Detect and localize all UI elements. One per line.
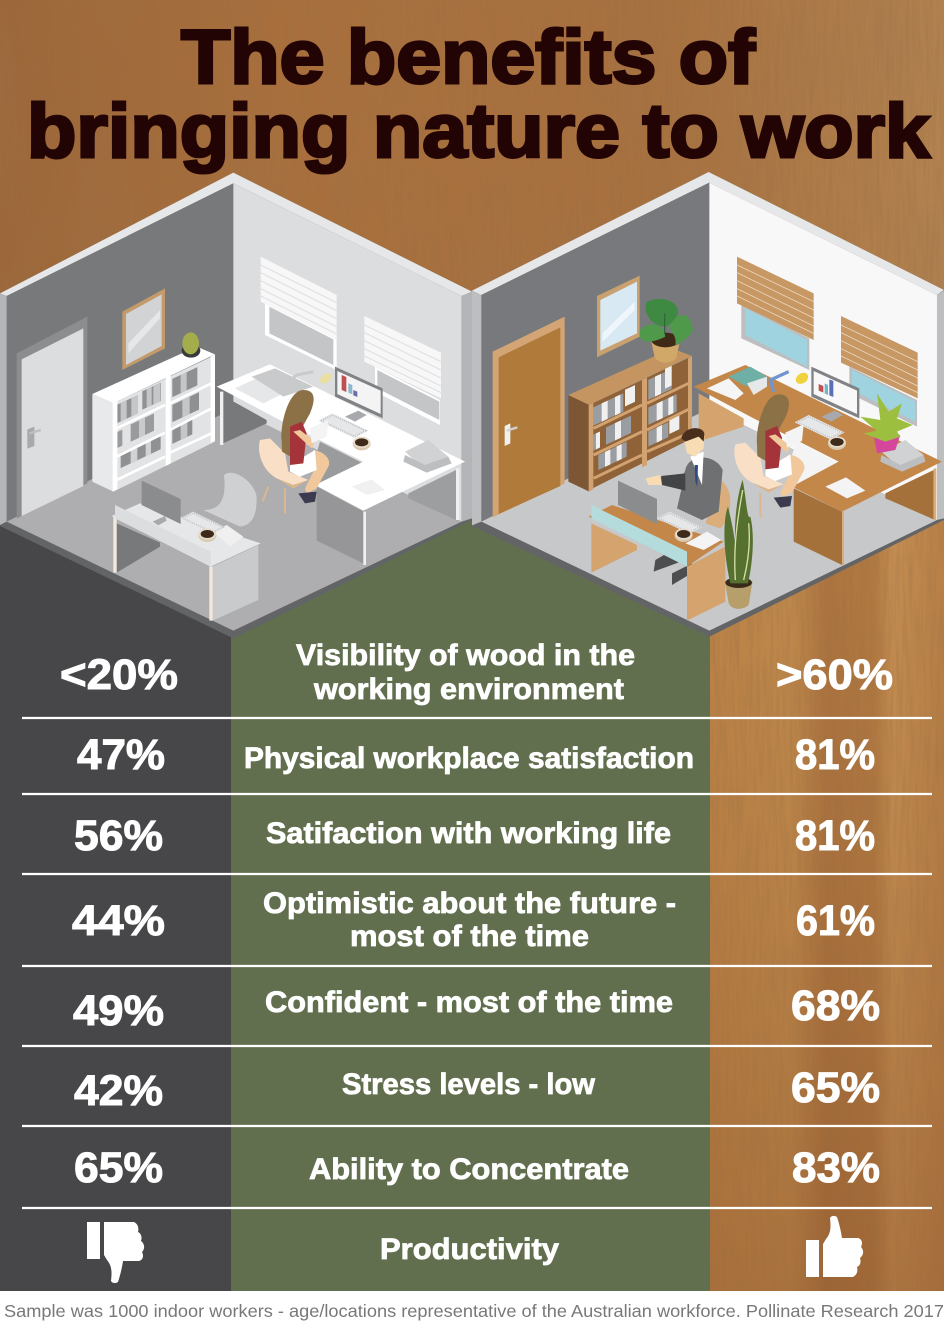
row label: productivity: Productivity <box>380 1233 559 1266</box>
title: bringing nature to work <box>27 89 931 174</box>
keyboard front <box>180 512 225 534</box>
potted plant on shelf <box>640 299 693 363</box>
keyboard <box>795 415 845 440</box>
plant on desk <box>860 393 913 453</box>
window blinds <box>261 257 441 425</box>
mirror frame <box>122 288 165 370</box>
footnote: Sample was 1000 indoor workers - age/locations representative of the Australian workforce. Pollinate Research 2017 <box>4 1301 944 1321</box>
row: ability to concentrate: 65% <box>74 1144 163 1192</box>
bookshelf <box>92 347 215 492</box>
seated man <box>645 428 730 585</box>
front desk <box>112 481 261 621</box>
row: satisfaction with working life <box>74 812 875 860</box>
row: optimistic about the future <box>72 887 875 953</box>
row: visibility of wood: working environment <box>313 673 624 706</box>
floor <box>481 408 937 631</box>
row: optimistic about the future: 61% <box>796 897 875 945</box>
small plant <box>182 332 200 358</box>
row: optimistic about the future: 44% <box>72 897 165 945</box>
icon: thumbs down <box>87 1222 144 1283</box>
seated woman <box>734 394 805 518</box>
left dark column <box>0 512 234 1291</box>
door <box>17 317 87 518</box>
left wall <box>7 183 233 522</box>
illustration: office with wood and plants <box>472 172 944 637</box>
row: ability to concentrate: Ability to Concentrate <box>309 1153 629 1186</box>
row: confident: 68% <box>791 982 880 1030</box>
row: visibility of wood: >60% <box>776 651 893 699</box>
row: stress levels <box>74 1064 880 1115</box>
corner desk <box>217 364 465 565</box>
row: visibility of wood: <20% <box>60 651 178 699</box>
coffee cup front <box>198 528 216 542</box>
row: stress levels: 42% <box>74 1067 163 1115</box>
row: physical workplace satisfaction: 81% <box>795 731 875 779</box>
right wall <box>233 183 462 522</box>
row: confident: 49% <box>73 987 164 1035</box>
row: confident <box>73 982 880 1035</box>
floor <box>7 408 462 631</box>
row: confident: Confident - most of the time <box>265 986 673 1019</box>
seated woman <box>259 390 329 513</box>
corner desk <box>694 365 942 565</box>
coffee cup front <box>675 528 693 542</box>
row: optimistic about the future: Optimistic about the future - <box>263 887 676 920</box>
wall end posts <box>0 292 472 525</box>
front desk <box>589 481 725 621</box>
door <box>493 317 565 517</box>
row: ability to concentrate: 83% <box>792 1144 880 1192</box>
coffee cup <box>353 437 371 450</box>
monitor <box>335 367 383 422</box>
right wall <box>709 183 937 520</box>
row: satisfaction with working life: Satifaction with working life <box>266 817 671 850</box>
row: physical workplace satisfaction <box>77 731 875 779</box>
row: visibility of wood: Visibility of wood in the <box>296 639 635 672</box>
window picture <box>597 276 640 357</box>
keyboard front <box>657 512 702 534</box>
title: The benefits of <box>181 15 756 100</box>
spare chair <box>203 473 257 527</box>
left wall <box>481 183 709 522</box>
title <box>27 15 931 174</box>
centre green column <box>231 508 710 1291</box>
wall end posts <box>472 291 944 525</box>
icon: thumbs up <box>806 1216 863 1277</box>
row: stress levels: 65% <box>791 1064 880 1112</box>
snake plant <box>724 480 753 609</box>
row: physical workplace satisfaction: 47% <box>77 731 165 779</box>
illustration: plain office without wood or plants <box>0 173 472 638</box>
row: satisfaction with working life: 81% <box>795 812 875 860</box>
coffee cup <box>828 436 846 450</box>
row divider lines <box>22 718 932 1208</box>
bookshelf <box>568 348 692 492</box>
row: physical workplace satisfaction: Physical workplace satisfaction <box>244 742 694 775</box>
monitor <box>811 367 859 422</box>
row: satisfaction with working life: 56% <box>74 812 163 860</box>
window blinds <box>737 257 918 427</box>
row: visibility of wood <box>60 639 893 706</box>
row: optimistic about the future: most of the time <box>350 920 589 953</box>
row: stress levels: Stress levels - low <box>342 1068 596 1101</box>
keyboard <box>318 413 368 438</box>
row: ability to concentrate <box>74 1144 880 1192</box>
